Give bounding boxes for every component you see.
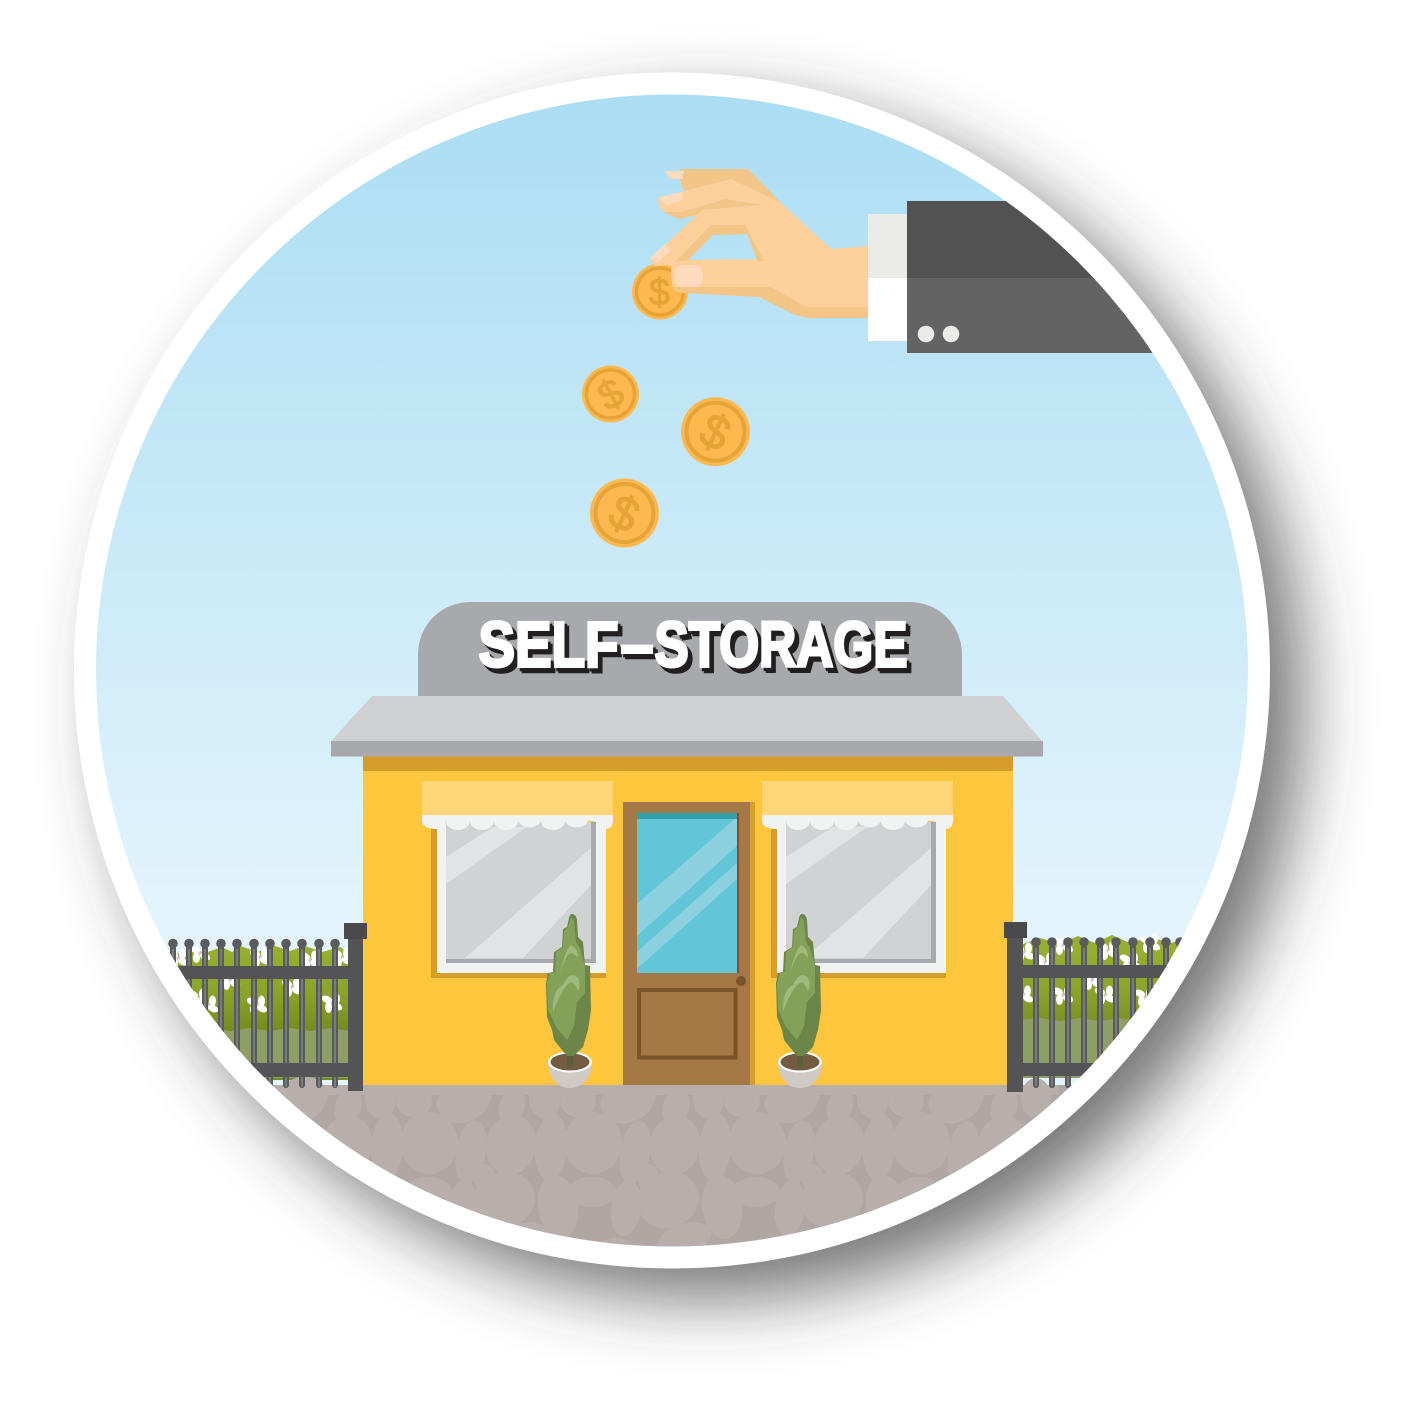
- left fence: [160, 923, 367, 1091]
- right hedge: [1023, 934, 1181, 1078]
- coin held in hand: [632, 264, 688, 320]
- falling coin 3: $: [601, 485, 647, 544]
- sign lettering: SELF: [478, 608, 618, 680]
- sign lettering: STORAGE: [657, 612, 910, 684]
- sign board: [418, 602, 962, 697]
- falling coin 2: $: [692, 403, 738, 463]
- drop shadow of badge: [110, 106, 1302, 1298]
- suit sleeve and shirt cuff: [868, 201, 1207, 353]
- door: [623, 802, 755, 1085]
- right hedge flowers: [1012, 934, 1161, 1007]
- sign lettering: –: [620, 608, 654, 680]
- falling coin 3: [590, 478, 659, 548]
- door glass: [637, 813, 739, 973]
- sign lettering: SELF: [483, 614, 623, 686]
- hand: [650, 169, 868, 318]
- left window: [422, 781, 613, 978]
- sign lettering: SELF: [481, 612, 621, 684]
- circular badge: [74, 72, 1270, 1268]
- door knob: [736, 976, 746, 986]
- pavement: [272, 1077, 1072, 1246]
- falling coin 1: [582, 366, 639, 422]
- sign lettering: STORAGE: [659, 614, 912, 686]
- sign lettering: [478, 620, 912, 674]
- right window: [762, 781, 953, 978]
- shirt cuff: [868, 214, 907, 341]
- scene clipped to the circle: [90, 90, 1260, 1265]
- falling coin 1: $: [591, 370, 631, 420]
- coin held in hand: $: [649, 272, 670, 314]
- sign lettering: –: [625, 614, 658, 686]
- sky: [90, 90, 1260, 1090]
- shop wall: [363, 757, 1013, 1085]
- door panel: [639, 990, 736, 1058]
- left potted plant: [546, 914, 592, 1088]
- left awning: [422, 781, 613, 830]
- sleeve buttons: [918, 326, 959, 342]
- right fence: [1004, 922, 1200, 1092]
- falling coin 2: [681, 397, 750, 466]
- left hedge: [160, 944, 353, 1080]
- left hedge flowers: [167, 944, 353, 1015]
- roof: [331, 696, 1043, 756]
- right awning: [762, 781, 953, 830]
- shop building: [331, 602, 1043, 1088]
- white badge ring: [74, 72, 1270, 1268]
- sign lettering: –: [623, 612, 656, 684]
- right potted plant: [776, 914, 822, 1088]
- sleeve: [907, 201, 1207, 353]
- sign lettering: STORAGE: [654, 608, 908, 680]
